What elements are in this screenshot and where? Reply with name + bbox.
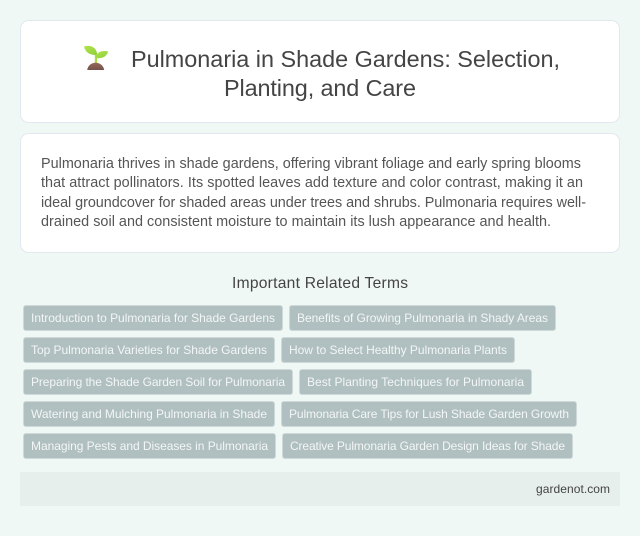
text block: description: Pulmonaria thrives in shade gardens, offering vibrant foliage and early spring blooms — [41, 156, 581, 172]
footer — [20, 472, 620, 506]
tag — [24, 370, 292, 394]
footer text: gardenot.com — [536, 482, 610, 496]
tag — [290, 306, 556, 330]
tag: Introduction to Pulmonaria for Shade Gardens — [31, 311, 275, 325]
title: Planting, and Care — [224, 75, 416, 101]
tag — [24, 402, 274, 426]
tag — [300, 370, 532, 394]
text block: description: ideal groundcover for shaded areas under trees and shrubs. Pulmonaria requires well- — [41, 195, 586, 211]
tag — [24, 338, 274, 362]
tag: Top Pulmonaria Varieties for Shade Gardens — [31, 343, 267, 357]
tag — [24, 434, 276, 458]
title: Pulmonaria in Shade Gardens: Selection, — [131, 46, 560, 72]
tag: Pulmonaria Care Tips for Lush Shade Garden Growth — [289, 407, 569, 421]
tag: Preparing the Shade Garden Soil for Pulmonaria — [31, 375, 285, 389]
tag: Watering and Mulching Pulmonaria in Shade — [31, 407, 267, 421]
tag: Best Planting Techniques for Pulmonaria — [307, 375, 524, 389]
title — [131, 46, 560, 101]
tag — [282, 402, 576, 426]
tag: Benefits of Growing Pulmonaria in Shady Areas — [297, 311, 548, 325]
tag: How to Select Healthy Pulmonaria Plants — [289, 343, 507, 357]
panel: header — [20, 20, 620, 122]
tag — [24, 306, 282, 330]
text block: description — [41, 156, 586, 230]
tag — [282, 434, 572, 458]
tag: Managing Pests and Diseases in Pulmonaria — [31, 439, 268, 453]
heading: related terms: Important Related Terms — [232, 275, 408, 292]
panel: description — [20, 134, 620, 252]
tag — [282, 338, 514, 362]
text block: description: drained soil and consistent moisture to maintain its lush appearance and health. — [41, 214, 551, 230]
tag list — [24, 306, 576, 458]
text block: description: that attract pollinators. Its spotted leaves add texture and color contrast, making it an — [41, 175, 583, 191]
icon: seedling — [84, 46, 108, 70]
tag: Creative Pulmonaria Garden Design Ideas for Shade — [290, 439, 565, 453]
